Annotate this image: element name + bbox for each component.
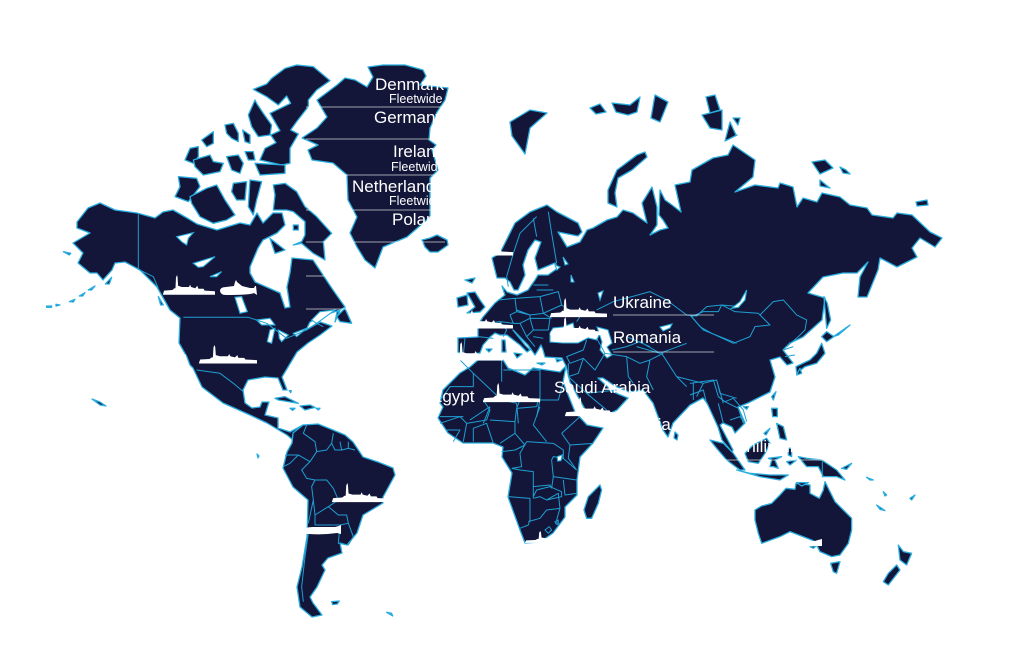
landmass: Hawaii and Galapagos bbox=[92, 399, 259, 458]
icon: warship off Canada bbox=[163, 275, 215, 295]
label: United States: United States bbox=[85, 348, 187, 367]
icon: warship over Spain bbox=[446, 342, 503, 360]
ship icons bbox=[163, 237, 822, 547]
lakes of North America bbox=[177, 233, 335, 343]
label: Denmark fleetwide: Fleetwide bbox=[389, 92, 443, 106]
icon: warship over United States bbox=[199, 345, 257, 363]
landmass: British Isles, Iceland and European islands bbox=[422, 235, 678, 440]
landmass: Arctic archipelago west bbox=[47, 177, 352, 392]
label: Netherlands fleetwide: Fleetwide bbox=[389, 194, 443, 208]
Eurasia borders bbox=[463, 212, 740, 410]
icon: warship over Egypt label bbox=[483, 383, 540, 402]
label: Germany: Germany bbox=[374, 108, 444, 127]
landmass: Eurasia bbox=[458, 145, 942, 452]
landmass: Baffin Island bbox=[270, 183, 332, 260]
label: Poland: Poland bbox=[392, 210, 445, 229]
Aleutian chain bbox=[47, 277, 112, 307]
landmass: Sakhalin and Japan bbox=[796, 297, 850, 375]
landmass: South America bbox=[283, 424, 395, 617]
Mongolia and far east borders bbox=[692, 290, 807, 357]
label: Denmark: Denmark bbox=[375, 75, 444, 94]
landmass: Australia and New Zealand bbox=[755, 477, 915, 585]
North America borders bbox=[138, 214, 323, 392]
label: Egypt: Egypt bbox=[431, 387, 475, 406]
landmass: Greenland bbox=[302, 65, 448, 268]
label: Ireland: Ireland bbox=[393, 142, 445, 161]
icon: warship over Brazil bbox=[332, 483, 389, 502]
seas and lakes of Eurasia bbox=[550, 257, 672, 358]
world map bbox=[47, 65, 942, 617]
Africa borders bbox=[440, 400, 602, 533]
label: India: India bbox=[634, 415, 671, 434]
label: Ukraine: Ukraine bbox=[613, 293, 672, 312]
label: Philippines: Philippines bbox=[735, 437, 817, 456]
label: Saudi Arabia: Saudi Arabia bbox=[554, 378, 651, 397]
icon: submarine over Argentina bbox=[303, 525, 341, 534]
icon: warship over Black Sea bbox=[550, 317, 607, 335]
icon: submarine off Canada bbox=[220, 280, 257, 295]
icon: warship off South Africa bbox=[525, 531, 582, 543]
landmass: Southeast Asia islands bbox=[710, 392, 852, 480]
label: Ireland fleetwide: Fleetwide bbox=[391, 160, 445, 174]
South America detail bbox=[283, 425, 393, 616]
landmass: Arctic islands of Europe and Asia bbox=[510, 95, 928, 207]
country labels bbox=[85, 75, 817, 456]
landmass: Caribbean islands bbox=[275, 391, 320, 410]
label: Netherlands: Netherlands bbox=[352, 177, 444, 196]
Africa upper borders bbox=[440, 360, 563, 423]
icon: warship over Ukraine bbox=[550, 298, 607, 317]
icon: submarine off Australia bbox=[762, 539, 822, 547]
landmass: Africa bbox=[438, 360, 603, 543]
icon: warship over Germany bbox=[457, 310, 513, 328]
Southeast Asia borders bbox=[690, 380, 747, 423]
icon: warship over Arabia bbox=[565, 397, 622, 416]
landmass: North and Central America bbox=[73, 203, 345, 440]
icon: warship over Norway bbox=[456, 237, 513, 255]
landmass: Arctic archipelago north bbox=[185, 65, 330, 175]
callout lines bbox=[306, 107, 825, 460]
label: Romania: Romania bbox=[613, 328, 682, 347]
